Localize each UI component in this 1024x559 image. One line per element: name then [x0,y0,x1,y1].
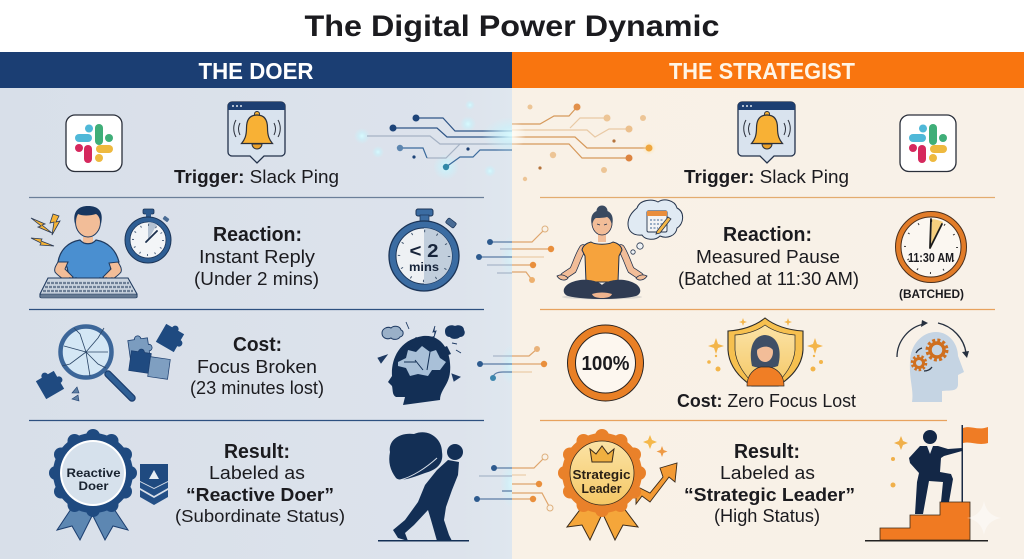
title: The Digital Power Dynamic [304,10,720,43]
icon: strategic leader rosette and arrow: Leader [582,482,622,496]
icon: strategic leader rosette and arrow: Strategic [572,468,631,482]
icon: rank chevrons [140,464,168,505]
icon: reactive doer rosette: Reactive [66,466,121,480]
text: strategist reaction: Measured Pause [696,246,840,267]
text: doer reaction [194,224,319,289]
circuit: trigger row [354,100,656,181]
panel: the strategist [512,52,1024,559]
header: the doer [0,52,512,88]
icon: typing person with lightning [31,206,137,298]
text: doer reaction: Reaction: [213,224,302,246]
header: the doer: THE DOER [198,58,314,84]
icon: clock 11:30 batched: 11:30 AM [908,251,954,265]
icon: head with gears [897,320,969,402]
icon: meditating woman with thought cloud [557,200,683,300]
text: doer cost [190,334,324,398]
text: strategist result [684,441,855,526]
icon: cracked magnifier and puzzle pieces [34,321,189,401]
text: strategist result: (High Status) [714,505,820,526]
icon: bell window right [738,102,795,163]
icon: reactive doer rosette [49,429,168,540]
text: doer result [175,441,345,526]
text: batched label: (BATCHED) [899,289,964,301]
header: the strategist [512,52,1024,88]
text: doer reaction: Instant Reply [199,246,316,267]
icon: clock 11:30 batched [896,212,966,301]
text: doer trigger: Trigger: Slack Ping [174,166,339,187]
icon: large stopwatch under 2 mins: mins [409,260,439,274]
icon: 100 percent ring [572,329,640,397]
text: strategist result: Result: [734,441,800,463]
text: doer cost: Cost: [233,334,282,356]
circuit: reaction row [476,226,554,283]
circuit: result row [474,454,553,511]
text: strategist result: Labeled as [720,462,815,483]
text: strategist reaction [678,224,859,289]
text: doer result: Result: [224,441,290,463]
icon: broken head silhouette [378,322,465,405]
icon: man carrying heavy sack [378,432,469,542]
text: strategist reaction: Reaction: [723,224,812,246]
icon: large stopwatch under 2 mins [389,209,459,291]
text: doer result: Labeled as [209,462,305,483]
icon: small stopwatch [125,209,171,263]
icon: slack logo left [66,115,122,172]
text: doer cost: (23 minutes lost) [190,378,324,398]
text: strategist result: “Strategic Leader” [684,484,855,505]
text: doer reaction: (Under 2 mins) [194,268,319,289]
icon: bell window left [228,102,285,163]
header: the strategist: THE STRATEGIST [669,58,855,84]
circuit: cost row [477,346,548,381]
text: doer result: (Subordinate Status) [175,506,345,526]
text: doer result: “Reactive Doer” [186,484,334,505]
text: strategist trigger: Trigger: Slack Ping [684,166,849,187]
text: strategist reaction: (Batched at 11:30 AM) [678,268,859,289]
icon: strategic leader rosette and arrow [558,429,677,540]
icon: leader climbing stairs with flag [865,425,988,542]
icon: large stopwatch under 2 mins: < 2 [410,241,438,261]
icon: sparkle watermark [967,501,1001,535]
icon: reactive doer rosette: Doer [78,479,109,493]
text: doer cost: Focus Broken [197,356,317,377]
panel: the doer [0,52,512,559]
text: strategist cost: Cost: Zero Focus Lost [677,390,856,411]
icon: slack logo right [900,115,956,172]
icon: 100 percent ring: 100% [582,353,630,375]
icon: shielded woman with sparkles [707,318,823,386]
